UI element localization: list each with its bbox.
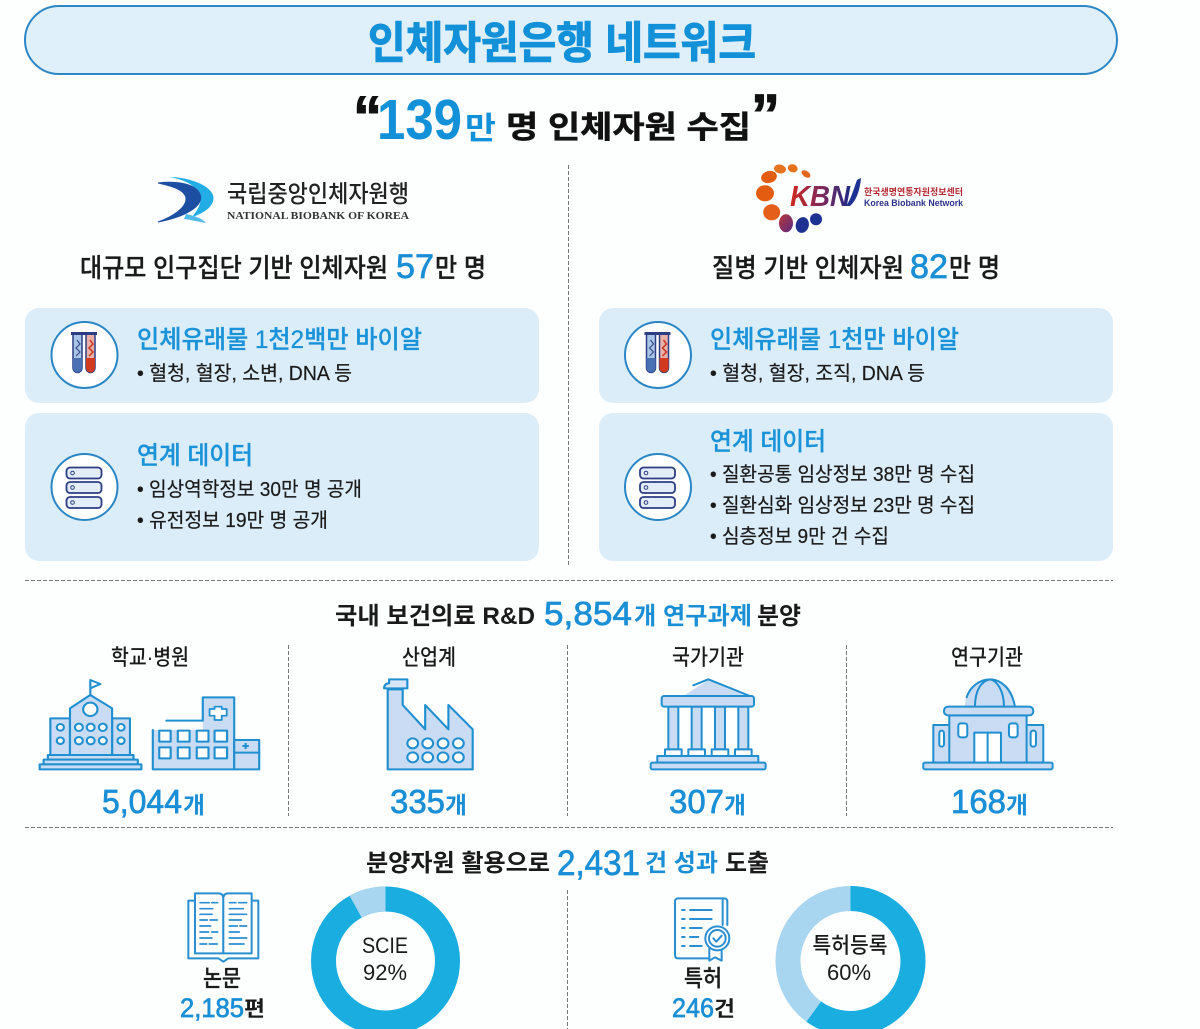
section heading: outcomes bbox=[366, 844, 769, 883]
panel: left specimens: • 혈청, 혈장, 소변, DNA 등 bbox=[137, 362, 352, 385]
icon: KBN dots bbox=[756, 163, 822, 234]
donut chart: SCIE 92%: SCIE bbox=[362, 933, 408, 958]
patents block: 특허 bbox=[684, 965, 722, 991]
icon: server bbox=[625, 454, 691, 520]
headline: 139만 명 인체자원 수집: “ bbox=[353, 85, 382, 150]
column: national institutions: 307 bbox=[669, 783, 724, 820]
donut chart: SCIE 92% bbox=[324, 899, 448, 1023]
headline: 139만 명 인체자원 수집 bbox=[353, 83, 780, 152]
panel: right linked data bbox=[599, 413, 1113, 561]
headline: 139만 명 인체자원 수집: ” bbox=[751, 83, 780, 148]
left subheading: 57 bbox=[396, 248, 434, 286]
panel: right linked data: • 질환공통 임상정보 38만 명 수집 bbox=[710, 463, 975, 486]
left subheading bbox=[80, 248, 486, 286]
headline: 139만 명 인체자원 수집: 139 bbox=[377, 88, 462, 152]
column: industry: 산업계 bbox=[402, 645, 456, 670]
section heading: R&D projects: 국내 보건의료 R&D bbox=[335, 603, 535, 630]
patents block: 건 bbox=[714, 998, 735, 1021]
icon: test tubes bbox=[52, 322, 118, 388]
column: schools and hospitals: 학교·병원 bbox=[111, 645, 189, 670]
logo: Korea Biobank Network: 한국생명연통자원정보센터 bbox=[864, 186, 963, 197]
column: research institutes bbox=[923, 645, 1053, 820]
papers block: 편 bbox=[244, 998, 265, 1021]
logo: National Biobank of Korea: 국립중앙인체자원행 bbox=[227, 181, 409, 208]
panel: left linked data: • 유전정보 19만 명 공개 bbox=[137, 509, 328, 532]
column: schools and hospitals bbox=[40, 645, 259, 820]
icon: hospital bbox=[153, 697, 259, 769]
icon: school bbox=[40, 680, 141, 769]
donut chart: patent registration 60%: 특허등록 bbox=[812, 933, 888, 958]
icon: government building bbox=[651, 679, 766, 769]
column: research institutes: 168 bbox=[951, 783, 1006, 820]
panel: right linked data: • 질환심화 임상정보 23만 명 수집 bbox=[710, 494, 975, 517]
papers block bbox=[180, 893, 265, 1023]
panel: left specimens: 인체유래물 1천2백만 바이알 bbox=[137, 326, 422, 354]
donut chart: SCIE 92%: 92% bbox=[363, 960, 407, 985]
patents block bbox=[672, 898, 735, 1023]
icon: server bbox=[52, 454, 118, 520]
icon: open book bbox=[188, 893, 258, 962]
donut chart: patent registration 60% bbox=[788, 898, 913, 1024]
headline: 139만 명 인체자원 수집: 명 인체자원 수집 bbox=[506, 110, 751, 145]
right subheading bbox=[712, 248, 1000, 286]
icon: NBK swoosh bbox=[158, 177, 213, 223]
panel: right linked data: 연계 데이터 bbox=[710, 428, 826, 456]
section heading: R&D projects: 5,854 bbox=[544, 595, 632, 632]
column: national institutions: 개 bbox=[724, 792, 746, 818]
icon: patent certificate bbox=[675, 898, 729, 961]
logo: Korea Biobank Network bbox=[756, 163, 964, 234]
panel: left linked data: • 임상역학정보 30만 명 공개 bbox=[137, 478, 362, 501]
panel: right specimens bbox=[599, 308, 1113, 403]
column: industry bbox=[384, 645, 473, 820]
section heading: R&D projects: 개 연구과제 bbox=[634, 603, 752, 630]
column: industry: 개 bbox=[445, 792, 467, 818]
left subheading: 만 명 bbox=[435, 253, 486, 283]
panel: right linked data: • 심층정보 9만 건 수집 bbox=[710, 525, 889, 548]
logo: Korea Biobank Network: KBN bbox=[790, 181, 851, 213]
donut chart: patent registration 60%: 60% bbox=[827, 960, 871, 985]
panel: right specimens: • 혈청, 혈장, 조직, DNA 등 bbox=[710, 362, 925, 385]
column: schools and hospitals: 개 bbox=[183, 792, 205, 818]
section heading: R&D projects bbox=[335, 595, 801, 632]
title banner bbox=[25, 6, 1117, 74]
headline: 139만 명 인체자원 수집: 만 bbox=[465, 111, 496, 146]
section heading: outcomes: 도출 bbox=[725, 850, 769, 877]
column: national institutions: 국가기관 bbox=[672, 645, 744, 670]
logo: Korea Biobank Network: Korea Biobank Network bbox=[864, 198, 964, 208]
right subheading: 82 bbox=[910, 248, 948, 286]
logo: National Biobank of Korea bbox=[158, 177, 409, 223]
panel: left specimens bbox=[25, 308, 539, 403]
title banner: 인체자원은행 네트워크 bbox=[368, 19, 756, 68]
right subheading: 만 명 bbox=[949, 253, 1000, 283]
icon: factory bbox=[384, 679, 473, 769]
section heading: R&D projects: 분양 bbox=[757, 603, 801, 630]
column: research institutes: 개 bbox=[1006, 792, 1028, 818]
section heading: outcomes: 분양자원 활용으로 bbox=[366, 850, 550, 877]
column: industry: 335 bbox=[390, 783, 445, 820]
papers block: 2,185 bbox=[180, 993, 244, 1023]
logo: National Biobank of Korea: NATIONAL BIOBANK OF KOREA bbox=[227, 210, 409, 222]
section heading: outcomes: 건 성과 bbox=[645, 850, 718, 877]
icon: observatory bbox=[923, 679, 1053, 769]
column: schools and hospitals: 5,044 bbox=[102, 783, 182, 820]
column: national institutions bbox=[651, 645, 766, 820]
papers block: 논문 bbox=[203, 965, 241, 991]
right subheading: 질병 기반 인체자원 bbox=[712, 253, 904, 283]
panel: left linked data: 연계 데이터 bbox=[137, 442, 253, 470]
column: research institutes: 연구기관 bbox=[951, 645, 1023, 670]
panel: right specimens: 인체유래물 1천만 바이알 bbox=[710, 326, 959, 354]
panel: left linked data bbox=[25, 413, 539, 561]
icon: test tubes bbox=[625, 322, 691, 388]
patents block: 246 bbox=[672, 993, 714, 1023]
section heading: outcomes: 2,431 bbox=[557, 844, 640, 883]
left subheading: 대규모 인구집단 기반 인체자원 bbox=[80, 253, 388, 283]
